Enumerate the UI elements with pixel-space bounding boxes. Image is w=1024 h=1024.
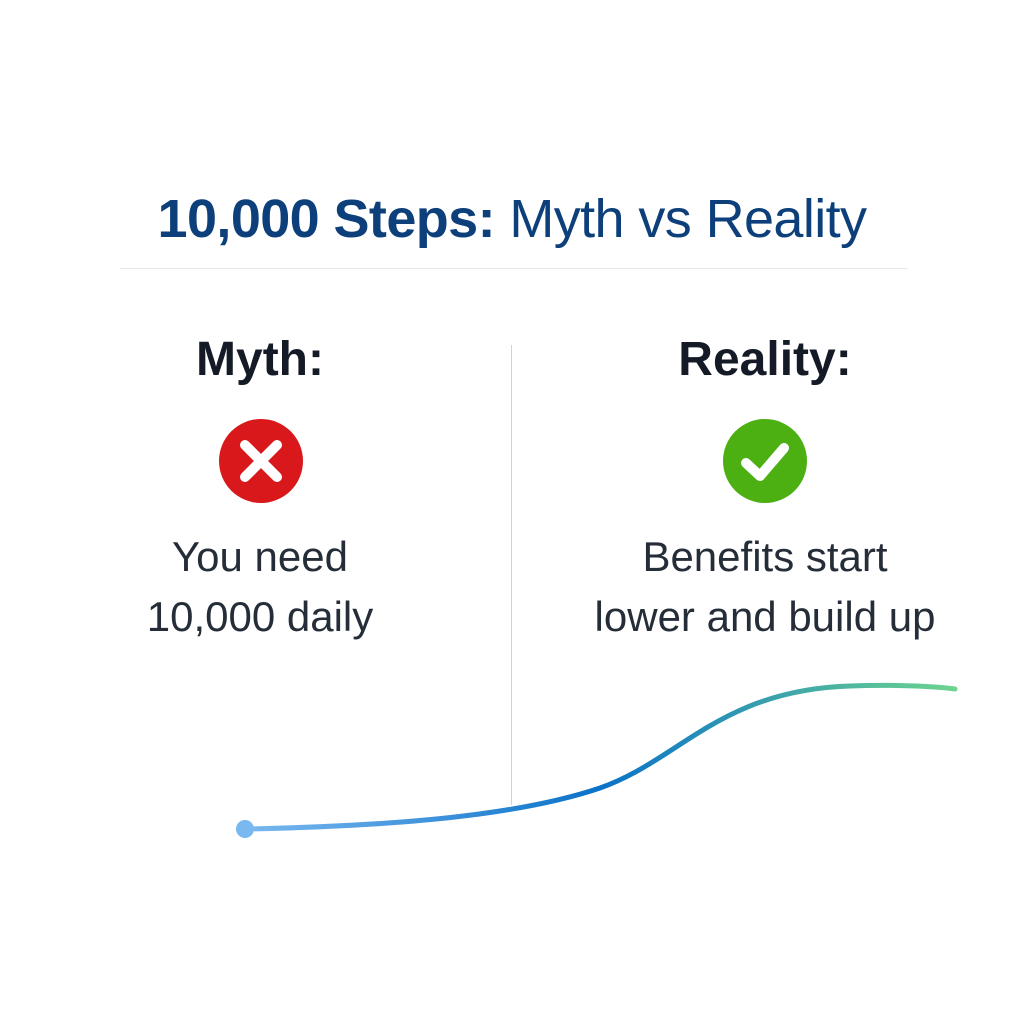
text: reality <box>595 533 935 640</box>
icon: green check <box>723 419 807 503</box>
panel: myth <box>147 333 374 640</box>
text: myth <box>147 533 374 640</box>
text: myth: You need <box>172 533 348 580</box>
title: 10,000 Steps: Myth vs Reality <box>158 189 866 249</box>
icon: red x <box>219 419 303 503</box>
heading: reality: Reality: <box>678 333 852 386</box>
text: reality: Benefits start <box>642 533 888 580</box>
text: reality: lower and build up <box>595 593 935 640</box>
text: myth: 10,000 daily <box>147 593 373 640</box>
panel: reality <box>595 333 935 640</box>
heading: myth: Myth: <box>196 333 324 386</box>
